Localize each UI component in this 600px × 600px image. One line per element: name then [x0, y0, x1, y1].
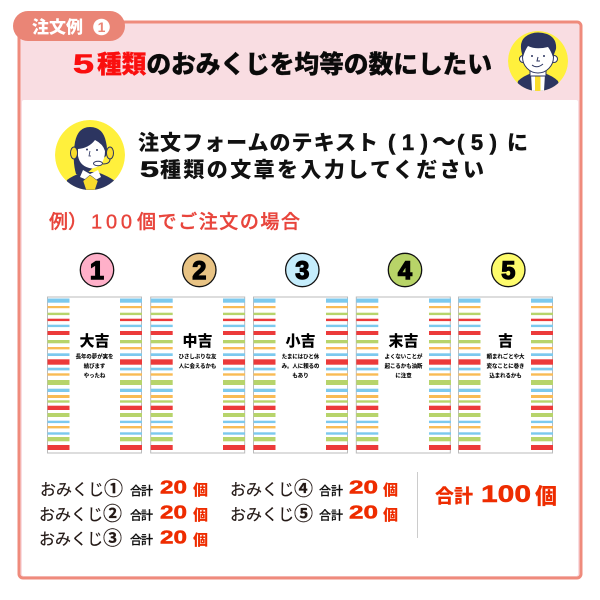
card 4: 末吉: 末吉	[388, 332, 419, 350]
instruction text: に	[507, 132, 528, 155]
tally: おみくじ2: 合計	[130, 508, 153, 522]
example heading	[49, 211, 300, 234]
card 2: 中吉: 人に会えるかも	[179, 362, 216, 370]
number badge 5	[492, 253, 525, 287]
tally: おみくじ3: 合計	[130, 532, 153, 547]
card 5: 吉: 吉	[498, 332, 513, 350]
tag: order example 1: 注文例	[32, 17, 83, 37]
card 4: 末吉	[356, 297, 451, 453]
tally: おみくじ3: 個	[193, 532, 208, 549]
number badge 3	[286, 253, 319, 287]
tally: おみくじ4: 合計	[319, 483, 343, 498]
instruction text: (1)	[388, 130, 428, 155]
tally: おみくじ2: 個	[193, 507, 208, 524]
tag: order example 1	[13, 11, 125, 41]
tally: おみくじ2	[39, 502, 208, 525]
tally: おみくじ5: おみくじ⑤	[230, 503, 313, 525]
example heading: 100	[91, 212, 132, 234]
instruction text: 5	[140, 157, 159, 182]
tally: おみくじ1	[40, 477, 208, 500]
number badge 1	[80, 253, 114, 287]
number badge 4	[388, 253, 422, 287]
card 5: 吉	[458, 297, 553, 453]
card 5: 吉: 込まれるかも	[489, 372, 522, 380]
card 1: 大吉: 長年の夢が実を	[76, 352, 113, 360]
number badge 3: 3	[295, 257, 309, 285]
tally: おみくじ3	[39, 527, 208, 550]
tally: おみくじ3: 20	[160, 527, 187, 547]
card 3: 小吉: み。人に頼るの	[282, 362, 319, 370]
card 5: 吉: 変なことに巻き	[487, 362, 524, 370]
example heading: 個でご注文の場合	[137, 211, 300, 233]
grand total: 個	[535, 484, 557, 509]
instruction text: 種類の文章を入力してください	[160, 159, 484, 182]
tally: おみくじ5: 合計	[319, 508, 343, 522]
number badge 2	[183, 253, 216, 287]
number badge 4: 4	[398, 257, 412, 285]
icon: man avatar	[508, 31, 568, 92]
tally: おみくじ4: 20	[349, 477, 378, 497]
grand total: 合計	[435, 486, 473, 508]
card 1: 大吉: 大吉	[79, 332, 110, 350]
card 4: 末吉: に注意	[395, 372, 412, 380]
card 4: 末吉: よくないことが	[385, 352, 423, 360]
title: 5	[73, 49, 94, 79]
tag: order example 1: 1	[98, 19, 106, 35]
card 3: 小吉: もあり	[292, 372, 309, 380]
card 2: 中吉	[151, 297, 245, 453]
tally: おみくじ1: 合計	[130, 483, 153, 498]
tally: おみくじ1: 20	[160, 477, 187, 497]
icon: operator avatar	[55, 120, 125, 192]
card 3: 小吉: たまにはひと休	[282, 352, 320, 360]
instruction text: ～	[432, 129, 456, 156]
tally: おみくじ5	[230, 502, 398, 525]
number badge 1: 1	[90, 257, 104, 285]
card 1: 大吉: やったね	[84, 372, 106, 380]
tally: おみくじ4: 個	[383, 482, 398, 499]
tally: おみくじ1: おみくじ①	[40, 478, 123, 500]
tally: おみくじ1: 個	[193, 482, 208, 499]
card 3: 小吉: 小吉	[285, 332, 316, 350]
tally: おみくじ2: おみくじ②	[39, 503, 122, 525]
card 2: 中吉: ひさしぶりな友	[179, 352, 217, 360]
tally: おみくじ5: 個	[383, 507, 398, 524]
example heading: 例）	[49, 211, 87, 233]
grand total: 100	[481, 481, 531, 508]
card 3: 小吉	[254, 297, 348, 453]
tally: おみくじ2: 20	[160, 502, 187, 522]
card 2: 中吉: 中吉	[182, 332, 213, 350]
tally: おみくじ5: 20	[349, 502, 378, 522]
tally: おみくじ4	[230, 477, 398, 500]
tally: おみくじ4: おみくじ④	[230, 478, 313, 500]
card 4: 末吉: 起こるかも油断	[385, 362, 423, 370]
card 5: 吉: 頼まれごとや大	[487, 352, 525, 360]
card 1: 大吉: 結びます	[84, 362, 106, 370]
tally: おみくじ3: おみくじ③	[39, 528, 122, 550]
instruction text	[138, 129, 528, 182]
grand total	[435, 481, 557, 509]
instruction text: (5)	[457, 130, 497, 155]
card 1: 大吉	[48, 297, 142, 453]
number badge 2: 2	[192, 257, 206, 285]
instruction text: 注文フォームのテキスト	[138, 132, 378, 155]
title: 種類のおみくじを均等の数にしたい	[97, 50, 492, 79]
number badge 5: 5	[501, 257, 515, 285]
